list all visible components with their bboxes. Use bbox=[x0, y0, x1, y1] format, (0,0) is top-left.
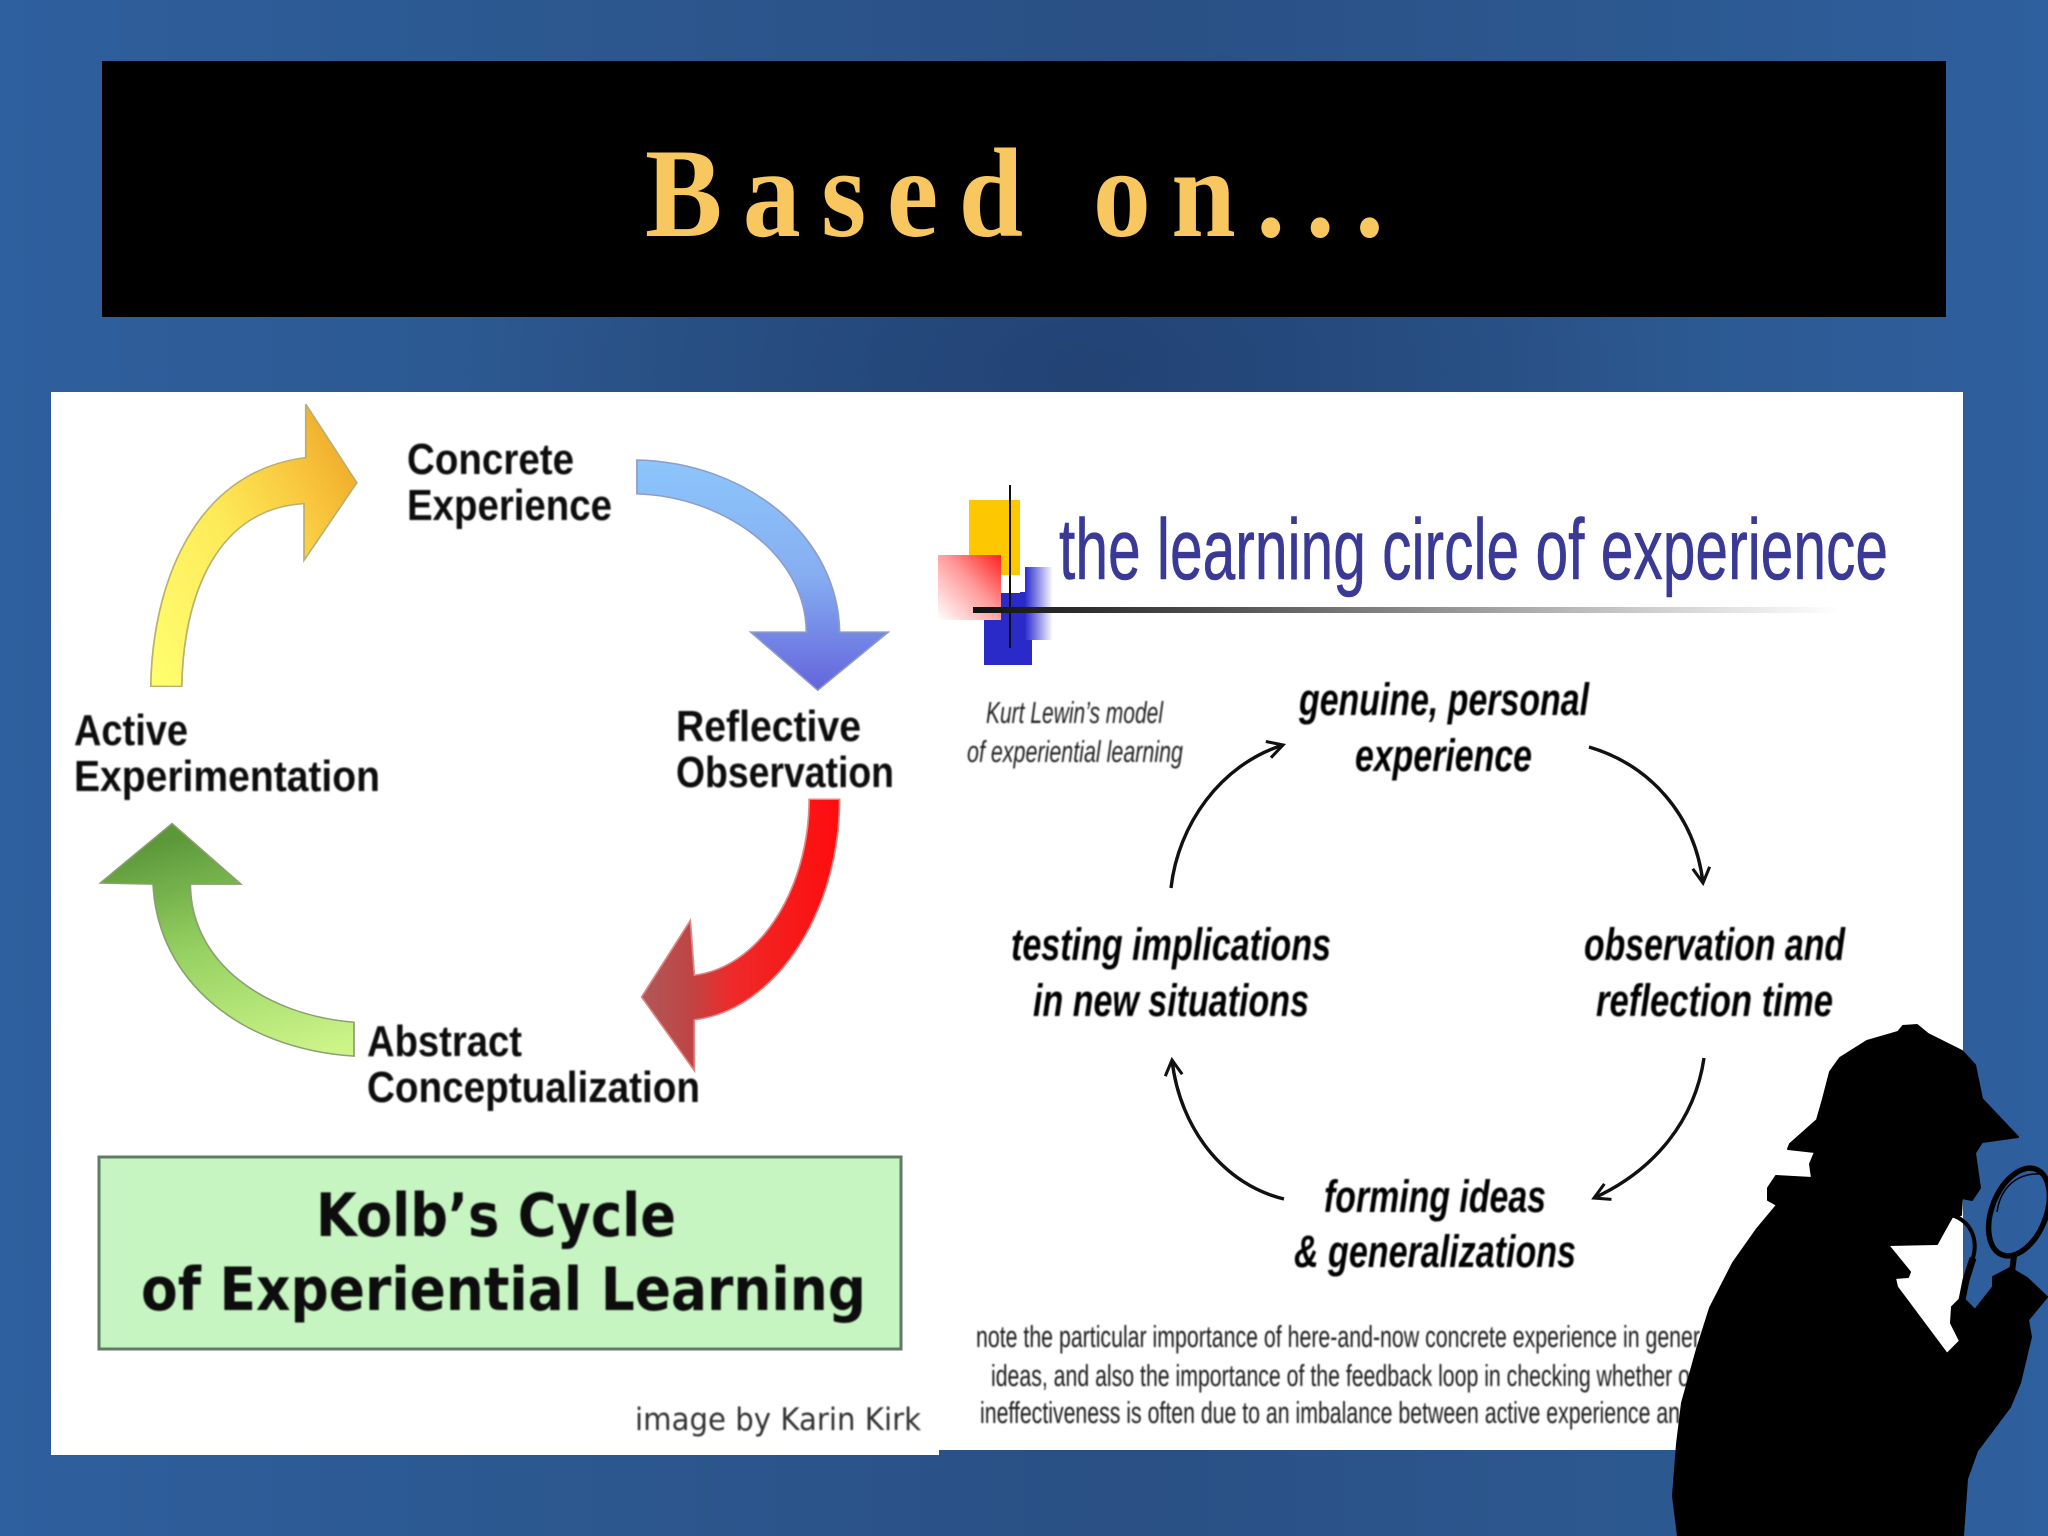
label: Concrete Experience: Experience bbox=[407, 481, 612, 530]
note text bbox=[976, 1319, 1700, 1430]
label: Reflective Observation: Reflective bbox=[676, 702, 861, 751]
arrow: red bbox=[642, 799, 840, 1071]
label: Active Experimentation bbox=[74, 706, 380, 801]
magnifier lens and handle bbox=[1952, 1159, 2048, 1300]
node: testing implications in new situations bbox=[1011, 919, 1331, 1026]
caption: Kurt Lewin's model bbox=[967, 695, 1183, 769]
arrows: Kolb cycle bbox=[100, 404, 888, 1071]
node: observation and reflection time bbox=[1584, 919, 1846, 1026]
title text: Based on... bbox=[645, 123, 1384, 264]
node: genuine, personal experience: experience bbox=[1355, 730, 1532, 781]
label: Concrete Experience bbox=[407, 435, 612, 530]
label: Reflective Observation: Observation bbox=[676, 748, 894, 797]
heading underline bbox=[973, 607, 1839, 613]
icon: detective silhouette with magnifying glass bbox=[1673, 1025, 2048, 1536]
node: genuine, personal experience bbox=[1298, 674, 1590, 781]
label: Abstract Conceptualization: Abstract bbox=[367, 1017, 522, 1066]
box: Kolb's Cycle of Experiential Learning: Kolb’s Cycle bbox=[316, 1181, 676, 1251]
arrow: blue bbox=[637, 460, 888, 690]
label: Abstract Conceptualization bbox=[367, 1017, 700, 1112]
panel: Kolb's cycle bbox=[51, 392, 939, 1455]
arrow: yellow bbox=[151, 404, 357, 686]
node: observation and reflection time: reflection time bbox=[1596, 975, 1833, 1026]
arrow: experience to observation bbox=[1589, 747, 1703, 883]
node: observation and reflection time: observation and bbox=[1584, 919, 1846, 970]
label: Concrete Experience: Concrete bbox=[407, 435, 574, 484]
arrow: ideas to testing bbox=[1172, 1060, 1284, 1199]
label: Reflective Observation bbox=[676, 702, 894, 797]
label: Active Experimentation: Active bbox=[74, 706, 188, 755]
arrow: observation to ideas bbox=[1594, 1058, 1704, 1198]
note text: note the particular importance of here-and-now concrete experience in gener bbox=[976, 1319, 1700, 1354]
node: testing implications in new situations: testing implications bbox=[1011, 919, 1331, 970]
note text: ideas, and also the importance of the feedback loop in checking whether o bbox=[991, 1358, 1690, 1393]
icon: colored squares logo bbox=[938, 485, 1053, 665]
arrow: testing to experience bbox=[1171, 745, 1283, 888]
node: testing implications in new situations: in new situations bbox=[1033, 975, 1309, 1026]
panel: learning circle of experience bbox=[938, 392, 1963, 1450]
node: genuine, personal experience: genuine, personal bbox=[1298, 674, 1590, 725]
box: Kolb's Cycle of Experiential Learning bbox=[99, 1157, 901, 1349]
node: forming ideas & generalizations: forming ideas bbox=[1324, 1171, 1546, 1222]
node: forming ideas & generalizations: & generalizations bbox=[1294, 1226, 1576, 1277]
circle arrows bbox=[1171, 745, 1704, 1199]
note text: ineffectiveness is often due to an imbalance between active experience an bbox=[980, 1395, 1680, 1430]
label: Active Experimentation: Experimentation bbox=[74, 752, 380, 801]
title banner bbox=[102, 61, 1946, 317]
caption: Kurt Lewin's model: Kurt Lewin’s model bbox=[986, 695, 1164, 730]
label: Abstract Conceptualization: Conceptualization bbox=[367, 1063, 700, 1112]
image credit: image by Karin Kirk bbox=[635, 1402, 921, 1438]
box: Kolb's Cycle of Experiential Learning: of Experiential Learning bbox=[141, 1255, 866, 1325]
caption: Kurt Lewin's model: of experiential learning bbox=[967, 734, 1183, 769]
arrow: green bbox=[100, 824, 354, 1056]
node: forming ideas & generalizations bbox=[1294, 1171, 1576, 1277]
